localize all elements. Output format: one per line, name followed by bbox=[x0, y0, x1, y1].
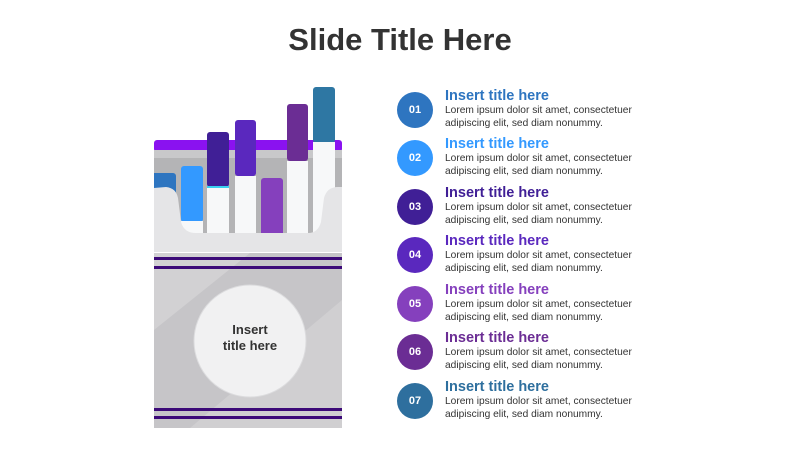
item 02: Lorem ipsum dolor sit amet, consectetuer bbox=[445, 153, 632, 164]
item 05 bbox=[397, 282, 632, 322]
item 03: 03 bbox=[409, 201, 421, 213]
center circle label bbox=[194, 285, 306, 397]
item 01: Insert title here bbox=[445, 88, 549, 104]
item 07: Insert title here bbox=[445, 379, 549, 395]
item 02: Insert title here bbox=[445, 136, 549, 152]
item 06: Insert title here bbox=[445, 330, 549, 346]
item 06: 06 bbox=[409, 346, 421, 358]
item 04: Insert title here bbox=[445, 233, 549, 249]
center circle label: title here bbox=[223, 338, 277, 353]
item 07 bbox=[397, 379, 632, 420]
item 01: adipiscing elit, sed diam nonummy. bbox=[445, 118, 603, 128]
item 03: adipiscing elit, sed diam nonummy. bbox=[445, 214, 603, 226]
item 04 bbox=[397, 233, 632, 274]
item 05: Insert title here bbox=[445, 282, 549, 298]
item 01 bbox=[397, 88, 632, 128]
item 02: 02 bbox=[409, 152, 421, 164]
title: Slide Title Here bbox=[288, 22, 512, 57]
item 05: 05 bbox=[409, 298, 421, 310]
item 02: adipiscing elit, sed diam nonummy. bbox=[445, 166, 603, 176]
item 01: Lorem ipsum dolor sit amet, consectetuer bbox=[445, 105, 632, 116]
item 07: Lorem ipsum dolor sit amet, consectetuer bbox=[445, 396, 632, 407]
item 03: Insert title here bbox=[445, 185, 549, 201]
item 07: adipiscing elit, sed diam nonummy. bbox=[445, 408, 603, 420]
item 06: adipiscing elit, sed diam nonummy. bbox=[445, 360, 603, 370]
item 07: 07 bbox=[409, 395, 421, 407]
item 04: adipiscing elit, sed diam nonummy. bbox=[445, 262, 603, 274]
item 03: Lorem ipsum dolor sit amet, consectetuer bbox=[445, 202, 632, 213]
center circle label: Insert bbox=[232, 322, 268, 337]
item 05: Lorem ipsum dolor sit amet, consectetuer bbox=[445, 299, 632, 310]
item 06 bbox=[397, 330, 632, 370]
item 06: Lorem ipsum dolor sit amet, consectetuer bbox=[445, 347, 632, 358]
item 03 bbox=[397, 185, 632, 226]
item 02 bbox=[397, 136, 632, 176]
item 01: 01 bbox=[409, 104, 421, 116]
item 05: adipiscing elit, sed diam nonummy. bbox=[445, 312, 603, 322]
item 04: 04 bbox=[409, 249, 421, 261]
illustration: pack bbox=[154, 87, 342, 428]
item 04: Lorem ipsum dolor sit amet, consectetuer bbox=[445, 250, 632, 261]
